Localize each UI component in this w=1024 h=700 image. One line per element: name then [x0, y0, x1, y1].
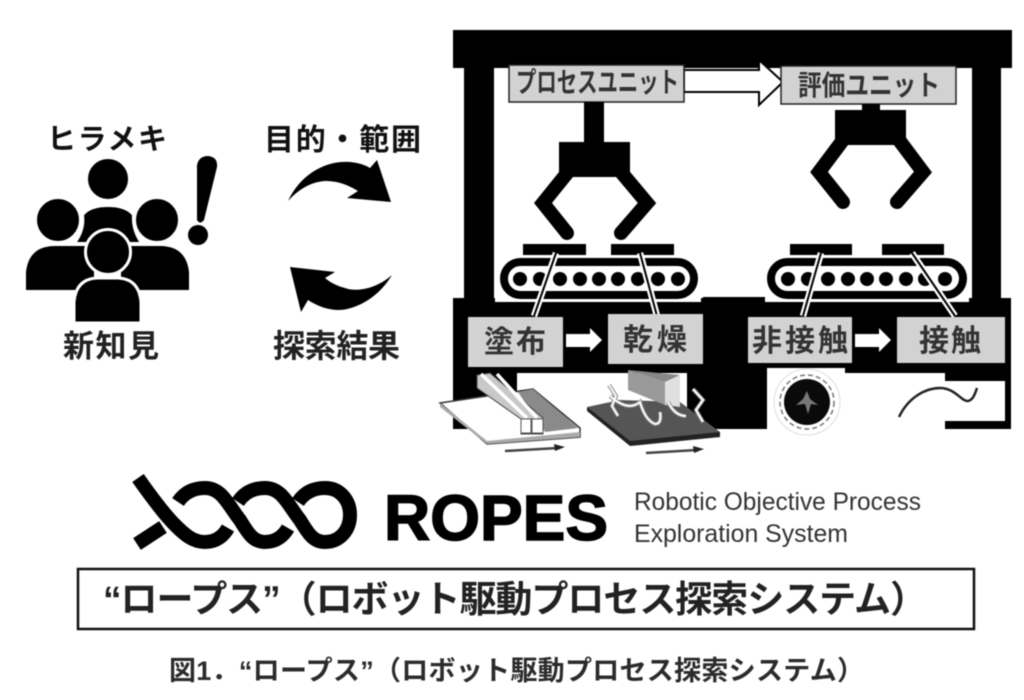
- machine frame: [453, 30, 1012, 429]
- icon: exclamation mark: [188, 156, 217, 245]
- box: non-contact: [748, 317, 852, 363]
- illustration: contact measurement curve: [899, 388, 977, 417]
- icon: group of people: [25, 158, 190, 323]
- box: process unit: [509, 65, 684, 102]
- frame interior: [494, 68, 972, 298]
- illustration: non-contact droplet image: [774, 369, 840, 435]
- panel: robot machine: [440, 30, 1012, 453]
- box: contact: [897, 317, 1005, 363]
- conveyor: evaluation line: [771, 244, 963, 295]
- conveyor: process line: [504, 244, 694, 295]
- subtitle line 1: Robotic Objective Process: [634, 488, 921, 516]
- panel: people with new insight: [25, 124, 217, 364]
- box: contact: 接触: [919, 325, 981, 358]
- label: 新知見: 新知見: [63, 329, 159, 364]
- icon: process gripper: [543, 102, 647, 233]
- conveyor left white surround: [495, 290, 701, 302]
- logo: ROPES: [137, 478, 921, 554]
- arrow: process to evaluation: [684, 60, 783, 105]
- label: 目的・範囲: 目的・範囲: [264, 124, 421, 157]
- box: coating: 塗布: [484, 326, 546, 359]
- subtitle line 2: Exploration System: [634, 520, 848, 548]
- panel: exploration cycle: [264, 124, 421, 364]
- box: coating: [468, 317, 563, 367]
- lower white cut-out: [517, 368, 1005, 432]
- wordmark: ROPES: [384, 482, 608, 554]
- banner text: “ロープス”（ロボット駆動プロセス探索システム）: [103, 579, 927, 620]
- arrow: coating to drying: [566, 328, 602, 352]
- icon: evaluation gripper: [819, 104, 923, 202]
- arrow: lower curved arrow: [290, 267, 392, 312]
- illustration: coating die on substrate: [440, 373, 580, 451]
- conveyor right white surround: [765, 290, 969, 302]
- box: process unit: プロセスユニット: [516, 67, 679, 98]
- caption: 図1．“ロープス”（ロボット駆動プロセス探索システム）: [169, 656, 864, 686]
- arrow: upper curved arrow: [288, 160, 391, 202]
- illustration: drying nozzle and plate: [587, 370, 720, 453]
- panel: name banner: [78, 569, 974, 629]
- box: non-contact: 非接触: [752, 325, 848, 358]
- central pillar: [703, 297, 765, 307]
- label: 探索結果: 探索結果: [273, 328, 400, 364]
- box: drying: 乾燥: [623, 324, 687, 357]
- box: evaluation unit: 評価ユニット: [798, 70, 940, 101]
- label: ヒラメキ: ヒラメキ: [47, 124, 167, 156]
- box: drying: [608, 314, 703, 364]
- arrow: non-contact to contact: [855, 328, 891, 352]
- connector lines from stations to labels: [534, 253, 955, 316]
- icon: rope knot: [137, 478, 350, 544]
